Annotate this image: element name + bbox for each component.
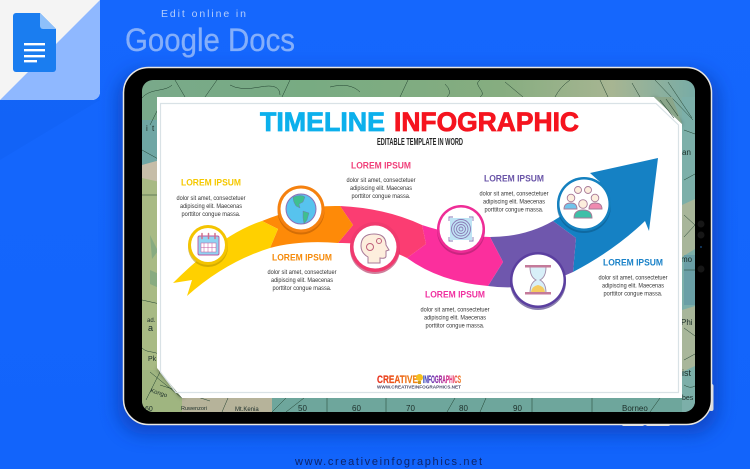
step 6 text: blue: porttitor congue massa. bbox=[604, 292, 663, 298]
footer url: www.creativeinfographics.net bbox=[294, 456, 482, 468]
icon: Google Docs document bbox=[13, 13, 56, 72]
title bbox=[260, 107, 579, 137]
map labels: mo bbox=[681, 255, 693, 264]
map labels: a bbox=[148, 323, 153, 333]
map labels: Phi bbox=[681, 318, 693, 327]
step 1 text: yellow: dolor sit amet, consectetuer bbox=[176, 196, 246, 202]
step 6 text: blue: dolor sit amet, consectetuer bbox=[598, 276, 668, 282]
step 2 text: orange: adipiscing elit. Maecenas bbox=[271, 278, 333, 284]
icon: hourglass bbox=[525, 265, 551, 294]
map labels: Kongo bbox=[149, 388, 168, 399]
step 5 text: purple bbox=[480, 174, 549, 214]
circle: people bbox=[557, 177, 611, 233]
icon: head with gears bbox=[361, 234, 389, 263]
title: INFOGRAPHIC bbox=[394, 107, 579, 137]
text: edit online in: Edit online in bbox=[161, 8, 246, 20]
text: INFOGRAPHICS bbox=[423, 374, 461, 386]
tablet shadow bbox=[118, 72, 718, 434]
step 6 text: blue: LOREM IPSUM bbox=[603, 258, 663, 268]
step 4 text: magenta: dolor sit amet, consectetuer bbox=[420, 308, 490, 314]
step 2 text: orange: dolor sit amet, consectetuer bbox=[268, 270, 337, 276]
map labels: 80 bbox=[459, 404, 468, 413]
map labels: 90 bbox=[513, 404, 522, 413]
step 3 text: pink bbox=[346, 160, 416, 200]
logo: creative infographics: WWW.CREATIVEINFOGRAPHICS.NET bbox=[377, 384, 461, 390]
step 2 text: orange: porttitor congue massa. bbox=[272, 286, 332, 292]
logo: creative infographics bbox=[377, 374, 461, 390]
title: TIMELINE bbox=[260, 107, 385, 137]
timeline arrow ribbon bbox=[173, 158, 658, 296]
map labels: 60 bbox=[352, 404, 361, 413]
panel: paper sheet bbox=[157, 97, 682, 398]
circle: globe bbox=[278, 186, 324, 234]
map labels: bes bbox=[682, 395, 694, 402]
map labels: Mt.Kenia bbox=[235, 407, 259, 413]
map labels: Borneo bbox=[622, 404, 648, 413]
step 3 text: pink: adipiscing elit. Maecenas bbox=[350, 186, 412, 192]
icon: calendar bbox=[198, 234, 219, 255]
icon: globe bbox=[286, 194, 316, 224]
map labels: 70 bbox=[406, 404, 415, 413]
step 3 text: pink: porttitor congue massa. bbox=[352, 194, 411, 200]
circle: hourglass bbox=[510, 252, 566, 310]
circle: fingerprint bbox=[437, 205, 485, 255]
icon: people bbox=[564, 186, 602, 218]
subtitle: EDITABLE TEMPLATE IN WORD bbox=[377, 137, 463, 148]
step 5 text: purple: dolor sit amet, consectetuer bbox=[480, 192, 549, 198]
tablet screen: map background bbox=[142, 80, 695, 413]
step 6 text: blue: adipiscing elit. Maecenas bbox=[602, 284, 664, 290]
heading: Google Docs: Google Docs bbox=[125, 22, 295, 58]
step 3 text: pink: LOREM IPSUM bbox=[351, 160, 411, 172]
map labels: Pk bbox=[148, 356, 157, 363]
logo: creative infographics: CREATIVE bbox=[377, 374, 418, 386]
step 5 text: purple: porttitor congue massa. bbox=[484, 208, 544, 214]
map labels: 50 bbox=[298, 404, 307, 413]
step 3 text: pink: dolor sit amet, consectetuer bbox=[346, 178, 416, 184]
panel: top-left corner badge bbox=[0, 0, 100, 160]
map labels: ist bbox=[682, 368, 691, 378]
step 2 text: orange: LOREM IPSUM bbox=[272, 252, 332, 264]
circle: calendar bbox=[188, 225, 228, 267]
map labels: i t bbox=[146, 124, 155, 133]
step 5 text: purple: LOREM IPSUM bbox=[484, 174, 544, 184]
step 2 text: orange bbox=[268, 252, 337, 292]
circle: head bbox=[350, 222, 400, 274]
map labels: ad. bbox=[147, 318, 156, 324]
icon: fingerprint bbox=[449, 217, 473, 241]
map labels bbox=[145, 124, 694, 413]
map labels: 60 bbox=[145, 406, 153, 413]
step 4 text: magenta: porttitor congue massa. bbox=[426, 324, 485, 330]
step 4 text: magenta bbox=[420, 290, 490, 330]
step 1 text: yellow: porttitor congue massa. bbox=[182, 212, 241, 218]
step 1 text: yellow bbox=[176, 178, 246, 218]
tablet device bbox=[124, 68, 714, 426]
step 6 text: blue bbox=[598, 258, 668, 298]
step 1 text: yellow: adipiscing elit. Maecenas bbox=[180, 204, 242, 210]
step 4 text: magenta: adipiscing elit. Maecenas bbox=[424, 316, 486, 322]
step 5 text: purple: adipiscing elit. Maecenas bbox=[483, 200, 545, 206]
map labels: an bbox=[682, 148, 691, 157]
step 4 text: magenta: LOREM IPSUM bbox=[425, 290, 485, 300]
map labels: Ruwenzori bbox=[181, 406, 207, 412]
step 1 text: yellow: LOREM IPSUM bbox=[181, 178, 241, 188]
